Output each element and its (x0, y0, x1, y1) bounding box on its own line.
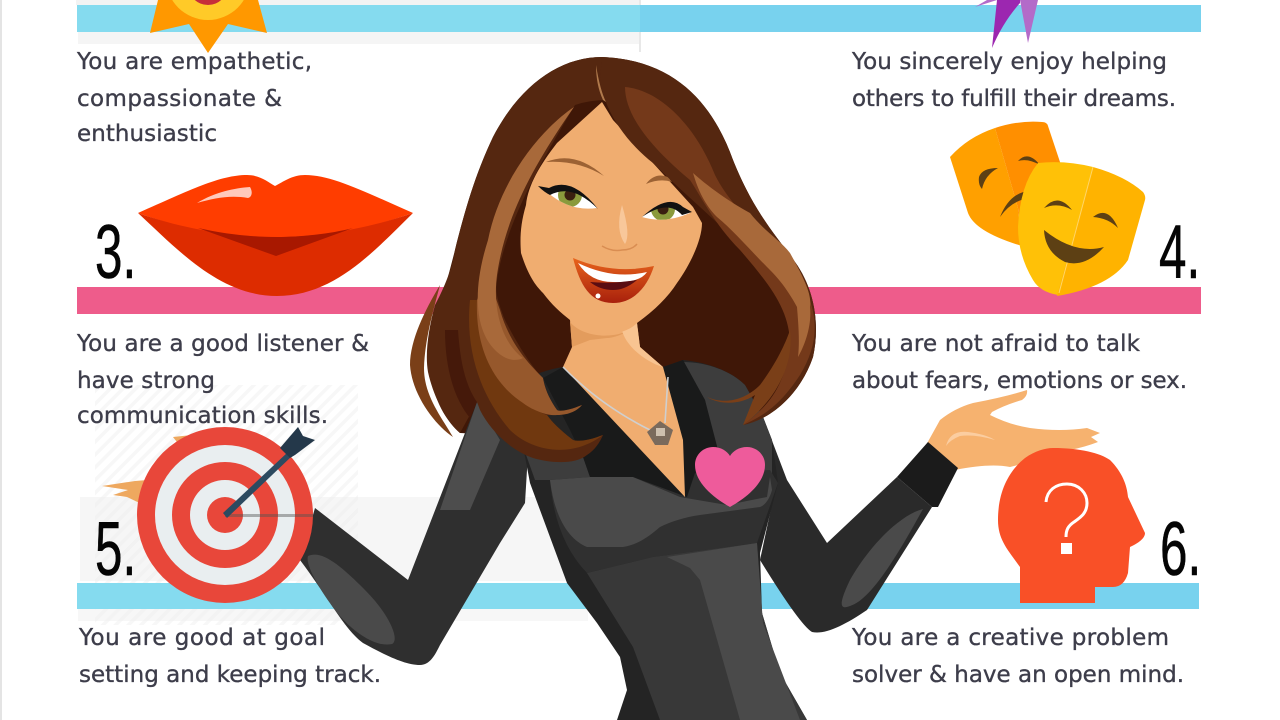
palm highlight (946, 432, 995, 446)
text: trait 3: have strong (77, 368, 215, 394)
right eye (642, 202, 692, 220)
character: woman (102, 57, 1100, 720)
text: trait 6: You are a creative problem (851, 625, 1169, 651)
hair curl right (707, 330, 791, 425)
heart (695, 447, 765, 507)
hair part (596, 65, 606, 102)
icon: head with question mark (998, 448, 1145, 603)
right sleeve (745, 385, 932, 633)
text: trait 1: You are empathetic, (76, 49, 312, 75)
number 4: 4. (1159, 209, 1200, 295)
text: trait 1: enthusiastic (77, 121, 217, 147)
right cuff (897, 442, 958, 507)
text: trait 5: setting and keeping track. (79, 662, 381, 688)
nose (602, 205, 637, 250)
left sleeve highlight (308, 555, 395, 645)
hair back (430, 57, 816, 440)
torso shoulders (510, 362, 772, 480)
text: trait 1: compassionate & (77, 86, 282, 112)
text: trait 3: communication skills. (77, 403, 328, 429)
left sleeve (300, 402, 530, 665)
hair highlight left (478, 107, 574, 360)
text: trait 4: You are not afraid to talk (851, 331, 1141, 357)
hair lobe mid left (469, 300, 603, 450)
eyebrows (546, 158, 672, 184)
text: trait 2: You sincerely enjoy helping (851, 49, 1167, 75)
number 5: 5. (95, 506, 136, 592)
icon: theatre masks (950, 122, 1145, 296)
neck shadow (570, 322, 637, 347)
neck highlight (622, 323, 663, 367)
right sleeve highlight (842, 509, 923, 607)
left eye (538, 183, 598, 209)
hair front left (427, 57, 606, 462)
necklace (563, 367, 673, 445)
hair strand left (410, 285, 453, 437)
text: trait 5: You are good at goal (78, 625, 325, 651)
torso waist (550, 470, 778, 573)
hair lobe right (625, 87, 815, 425)
smile (573, 258, 654, 303)
left hand (102, 435, 192, 512)
hair lobe upper left (477, 270, 582, 415)
text: trait 3: You are a good listener & (76, 331, 369, 357)
left upper arm panel (440, 402, 500, 510)
neck and chest (563, 320, 685, 497)
icon: lips (138, 175, 413, 296)
torso (477, 360, 807, 720)
hair dark stripe left (445, 330, 477, 418)
right hand (925, 390, 1100, 470)
text: trait 2: others to fulfill their dreams. (852, 86, 1176, 112)
hair front right (600, 57, 816, 425)
hair band right (693, 173, 810, 357)
number 3: 3. (95, 209, 136, 295)
icon: medal (150, 0, 267, 53)
collar (543, 360, 718, 497)
text: trait 4: about fears, emotions or sex. (852, 368, 1187, 394)
torso light panel (667, 543, 800, 720)
face (521, 102, 702, 334)
torso bust highlight (550, 477, 772, 547)
number 6: 6. (1160, 506, 1201, 592)
colored divider bars (77, 5, 1201, 609)
torso lower panel (587, 543, 807, 720)
text: trait 6: solver & have an open mind. (852, 662, 1184, 688)
icon: ribbon (975, 0, 1038, 48)
icon: target with arrow (137, 427, 315, 603)
